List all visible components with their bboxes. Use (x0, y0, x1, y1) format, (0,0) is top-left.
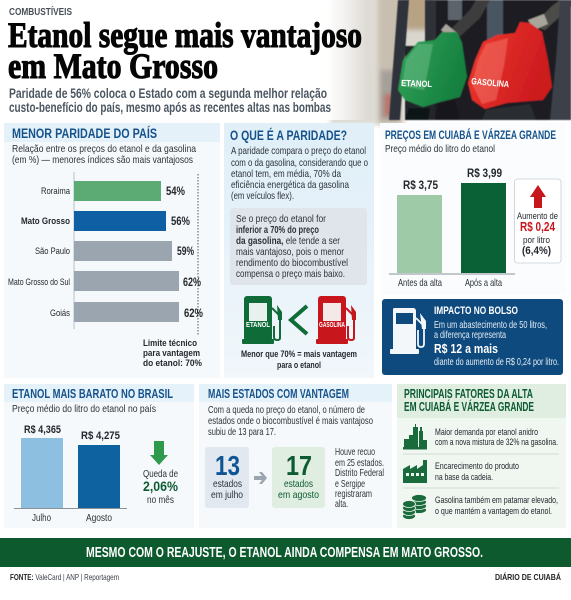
title (8, 15, 362, 86)
section tag: COMBUSTÍVEIS (9, 5, 72, 18)
nozzle label: etanol: ETANOL (401, 78, 433, 89)
heading: ETANOL MAIS BARATO NO BRASIL (12, 387, 173, 401)
icon: factory (403, 460, 427, 483)
heading: MAIS ESTADOS COM VANTAGEM (208, 387, 349, 401)
banner (0, 538, 571, 567)
stat card: 13 estados: em julho (211, 490, 243, 501)
side note (335, 447, 384, 510)
caption: para o etanol (277, 360, 321, 371)
stat card: 13 estados (205, 447, 249, 508)
bar chart: paridade por estado: Mato Grosso (21, 216, 70, 227)
subtitle: Paridade de 56% coloca o Estado com a segunda melhor relação (9, 86, 327, 101)
panel: principais fatores da alta (397, 384, 566, 528)
limit note: para vantagem (143, 348, 200, 359)
title: em Mato Grosso (8, 46, 218, 86)
callout: aumento: por litro (523, 235, 550, 246)
callout: aumento: (6,4%) (522, 245, 551, 257)
icon: bomba de etanol: ETANOL (246, 322, 271, 329)
heading: O QUE É A PARIDADE? (230, 127, 347, 143)
subheading: Preço médio do litro do etanol (385, 144, 495, 155)
icon: bomba de gasolina (316, 296, 356, 344)
photo: fuel nozzles (325, 0, 571, 125)
symbol: menor que (291, 306, 307, 334)
stat card: 17 estados: em agosto (278, 490, 319, 501)
caption (241, 349, 357, 371)
description: estados onde o biocombustível é mais vantajoso (208, 416, 373, 427)
callout: regra dos 70%: rendimento do biocombustível (236, 258, 348, 269)
arrow (254, 472, 267, 484)
stat card: 13 estados: 13 (215, 450, 240, 481)
impact text: R$ 12 a mais (434, 341, 498, 356)
callout: aumento: Aumento de (517, 211, 558, 222)
panel: impacto no bolso (382, 299, 563, 375)
description (208, 405, 373, 438)
bar chart: paridade por estado (8, 172, 203, 336)
side note: em 25 estados. (335, 458, 384, 469)
callout: regra dos 70%: mais vantajoso, pois o menor (236, 247, 344, 258)
side note: Houve recuo (335, 447, 375, 458)
icon: city (403, 424, 427, 450)
callout: queda: 2,06% (143, 478, 178, 494)
bar chart: paridade por estado: Mato Grosso do Sul (8, 277, 70, 288)
factor 2 (435, 461, 519, 483)
callout: queda: Queda de (143, 469, 178, 480)
callout: queda (143, 469, 178, 506)
explanation: eficiência energética da gasolina (231, 180, 349, 191)
panel: o que é a paridade (224, 123, 374, 378)
bar chart: antes e depois: R$ 3,99 (467, 166, 502, 180)
callout: regra dos 70%: compensa o preço mais baixo. (236, 269, 345, 280)
description: (em %) — menores índices são mais vantajosos (12, 155, 193, 166)
callout: regra dos 70%: da gasolina, ele tende a ser (236, 236, 340, 247)
impact text: IMPACTO NO BOLSO (434, 305, 518, 317)
description: subiu de 13 para 17. (208, 427, 276, 438)
bar chart: paridade por estado: 59% (177, 246, 194, 258)
stat card: 17 estados: estados (284, 479, 313, 490)
icon: green arrow down (150, 441, 168, 465)
subtitle (9, 86, 331, 115)
factor 3 (435, 495, 558, 517)
bar chart: julho e agosto: R$ 4,365 (24, 424, 61, 436)
bar chart: julho e agosto: R$ 4,275 (81, 430, 120, 442)
nozzle label: gasolina: GASOLINA (471, 76, 510, 89)
side note: Distrito Federal (335, 468, 384, 479)
side note: alta. (335, 499, 348, 510)
factor 1: Maior demanda por etanol anidro (435, 427, 538, 438)
icon: red arrow up (530, 185, 546, 208)
bar chart: julho e agosto: Julho (32, 513, 51, 524)
stat card: 17 estados (272, 447, 325, 508)
subheading: Preço médio do litro do etanol no país (12, 404, 156, 415)
bar chart: antes e depois (389, 166, 515, 289)
callout: aumento (514, 179, 561, 263)
icon: coins (402, 494, 426, 520)
explanation: etanol tem, em média, 70% da (231, 169, 341, 180)
limit note (143, 338, 202, 369)
callout: queda: no mês (147, 495, 174, 506)
bar chart: antes e depois: Antes da alta (398, 278, 442, 289)
explanation: (em veículos flex). (231, 191, 294, 202)
bar chart: paridade por estado: 62% (184, 308, 203, 320)
explanation: A paridade compara o preço do etanol (231, 146, 366, 157)
caption: Menor que 70% = mais vantagem (241, 349, 357, 360)
side note: registraram (335, 489, 372, 500)
callout: regra dos 70%: inferior a 70% do preço (236, 225, 319, 236)
icon: white pump (390, 308, 426, 354)
limit note: do etanol: 70% (143, 358, 202, 369)
description: Com a queda no preço do etanol, o número de (208, 405, 365, 416)
bar chart: paridade por estado: Roraima (41, 186, 71, 197)
factor 2: Encarecimento do produto (435, 461, 519, 472)
icon: bomba de etanol (242, 296, 282, 344)
source: FONTE: ValeCard | ANP | Reportagem (10, 572, 119, 582)
callout: aumento: R$ 0,24 (520, 220, 555, 234)
factor 2: na base da cadeia. (435, 472, 493, 483)
factor 1 (435, 427, 558, 448)
heading: MENOR PARIDADE DO PAÍS (12, 126, 157, 141)
panel: preços em cuiabá e várzea grande (380, 123, 566, 295)
heading (404, 387, 534, 414)
title: Etanol segue mais vantajoso (8, 15, 362, 55)
panel: menor paridade do país (4, 123, 220, 378)
icon: bomba de gasolina: GASOLINA (319, 322, 345, 329)
stat card: 17 estados: 17 (286, 450, 312, 481)
callout: regra dos 70% (230, 208, 367, 285)
bar chart: paridade por estado: 56% (171, 216, 190, 228)
side note: e Sergipe (335, 479, 365, 490)
callout: regra dos 70%: Se o preço do etanol for (236, 214, 326, 225)
bar chart: paridade por estado: Goiás (50, 308, 70, 319)
bar chart: julho e agosto: Agosto (86, 513, 112, 524)
bar chart: paridade por estado: São Paulo (35, 246, 70, 257)
explanation (231, 146, 368, 202)
impact text: a diferença representa (434, 330, 506, 341)
bar chart: antes e depois: Após a alta (465, 278, 502, 289)
description: Relação entre os preços do etanol e da gasolina (12, 144, 196, 155)
limit note: Limite técnico (143, 338, 197, 349)
impact text (434, 305, 559, 368)
description (12, 144, 196, 166)
subtitle: custo-benefício do país, mesmo após as recentes altas nas bombas (9, 100, 331, 115)
bar chart: paridade por estado: 54% (166, 186, 185, 198)
green nozzle (398, 32, 467, 107)
panel: etanol mais barato no brasil (4, 384, 194, 528)
stat card: 13 estados: estados (213, 479, 242, 490)
bar chart: julho e agosto (14, 424, 127, 524)
red nozzle (468, 22, 552, 109)
explanation: com o da gasolina, considerando que o (231, 158, 368, 169)
bar chart: paridade por estado: 62% (183, 277, 201, 289)
bar chart: antes e depois: R$ 3,75 (403, 178, 438, 192)
panel: mais estados com vantagem (199, 384, 392, 528)
